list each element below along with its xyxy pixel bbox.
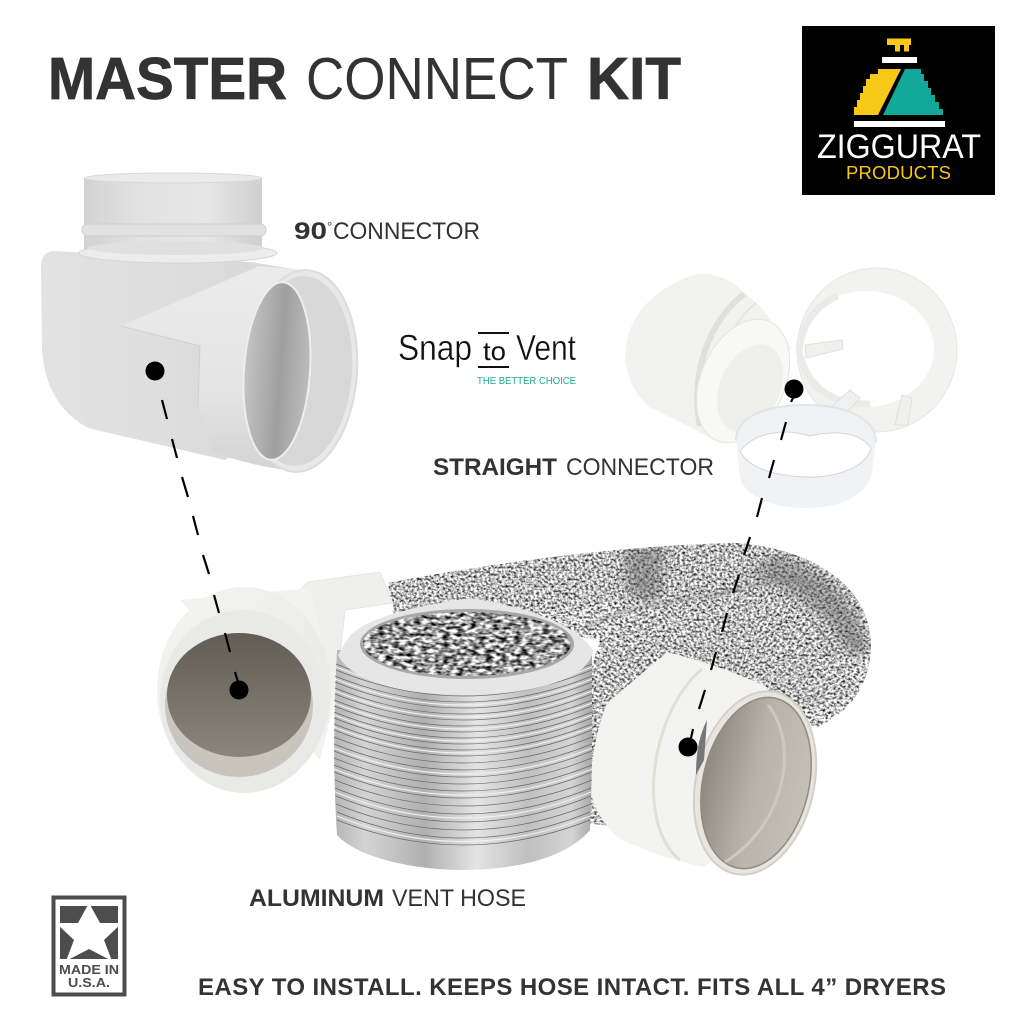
coil foil opening bbox=[338, 598, 593, 695]
leader line: 90 connector to pipe bbox=[146, 362, 248, 700]
logo wordmark: ZIGGURAT bbox=[817, 128, 981, 166]
logo: Ziggurat Products bbox=[802, 26, 995, 195]
tagline: EASY TO INSTALL. KEEPS HOSE INTACT. FITS ALL 4” DRYERS bbox=[198, 974, 946, 1001]
badge: made in USA bbox=[54, 898, 124, 994]
elbow body bbox=[41, 251, 300, 460]
product: 90 degree connector bbox=[41, 173, 364, 476]
logo: Snap to Vent: Snap bbox=[398, 327, 472, 368]
snap connector body bbox=[625, 274, 808, 457]
logo: Snap to Vent bbox=[398, 327, 576, 387]
title: KIT bbox=[587, 46, 681, 112]
leader line: straight connector to hose bbox=[678, 380, 804, 756]
title: MASTER bbox=[48, 46, 287, 112]
badge text: U.S.A. bbox=[68, 975, 110, 990]
product: aluminum vent hose assembly bbox=[157, 543, 871, 887]
label: straight connector: STRAIGHT bbox=[433, 454, 557, 481]
label: 90 connector: 90 bbox=[294, 218, 327, 245]
logo subtitle: PRODUCTS bbox=[846, 162, 951, 183]
title bbox=[48, 46, 681, 112]
clear ring bbox=[736, 405, 876, 508]
collar mouth bbox=[677, 679, 833, 887]
snap to vent tagline: THE BETTER CHOICE bbox=[477, 375, 576, 387]
label: aluminum vent hose bbox=[249, 885, 526, 912]
logo: Snap to Vent: Vent bbox=[516, 327, 576, 368]
pipe opening bbox=[160, 610, 324, 790]
left white elbow pipe bbox=[157, 572, 393, 793]
label: aluminum vent hose: VENT HOSE bbox=[392, 885, 526, 912]
title: CONNECT bbox=[306, 46, 568, 112]
label: straight connector bbox=[433, 454, 714, 481]
snap ring collar bbox=[797, 268, 957, 432]
elbow mouth bbox=[238, 266, 364, 476]
logo pyramid icon bbox=[854, 38, 945, 127]
foil hose loop bbox=[380, 543, 871, 830]
aluminum coil bbox=[334, 598, 593, 870]
elbow horizontal cylinder bbox=[121, 266, 345, 471]
white collar on hose bbox=[590, 652, 800, 867]
star icon bbox=[56, 903, 122, 961]
badge text: MADE IN bbox=[59, 962, 119, 977]
label: 90 connector: ° bbox=[327, 219, 332, 234]
logo: Snap to Vent: to bbox=[483, 336, 506, 366]
badge text bbox=[59, 962, 119, 990]
label: aluminum vent hose: ALUMINUM bbox=[249, 885, 384, 912]
label: 90 connector: CONNECTOR bbox=[333, 218, 480, 245]
elbow top neck bbox=[84, 178, 262, 258]
product: straight connector parts bbox=[625, 268, 957, 508]
label: straight connector: CONNECTOR bbox=[566, 454, 714, 481]
